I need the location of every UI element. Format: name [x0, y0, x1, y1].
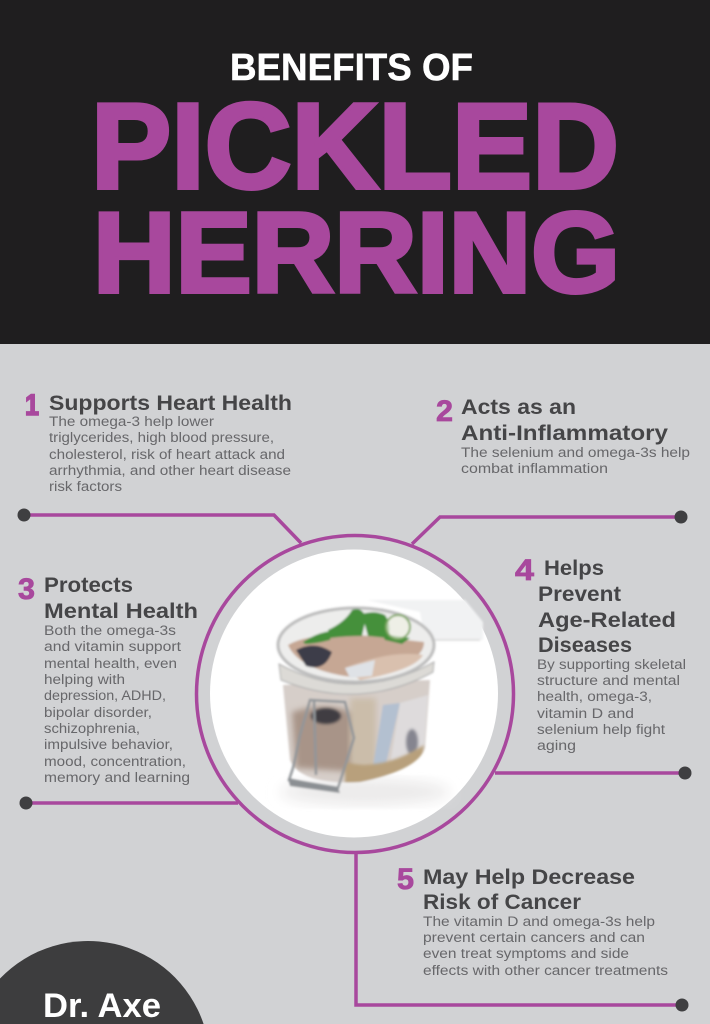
body 4: structure and mental [537, 673, 680, 688]
number 2: 2 [436, 395, 453, 428]
heading 2 [461, 396, 668, 445]
benefit 1 [25, 389, 292, 494]
body 4: health, omega-3, [537, 689, 652, 704]
jar of pickled herring [278, 600, 483, 806]
body 2: combat inflammation [461, 461, 608, 476]
heading 3 [44, 574, 198, 623]
body 4: selenium help fight [537, 722, 665, 737]
title: benefits of: BENEFITS OF [230, 47, 473, 89]
body 5: The vitamin D and omega-3s help [423, 914, 655, 929]
body 5: even treat symptoms and side [423, 946, 629, 961]
body 1: arrhythmia, and other heart disease [49, 463, 291, 478]
body 1: The omega-3 help lower [49, 414, 215, 429]
body 3: schizophrenia, [44, 721, 140, 736]
connector 2 [412, 510, 688, 544]
benefit 2 [436, 395, 690, 476]
connector 4 [495, 766, 692, 780]
heading 1: Supports Heart Health [49, 392, 292, 415]
heading 5 [423, 866, 635, 914]
body 1 [49, 414, 291, 494]
body 3: impulsive behavior, [44, 737, 173, 752]
logo text: Dr. Axe [43, 987, 161, 1024]
number 3: 3 [18, 573, 35, 606]
logo badge [0, 941, 204, 1024]
herb garnish [303, 609, 410, 644]
benefit 3 [18, 573, 198, 785]
body 4: vitamin D and [537, 706, 634, 721]
heading 5: May Help Decrease [423, 866, 635, 889]
heading 4: Diseases [538, 634, 632, 657]
body 5: effects with other cancer treatments [423, 963, 668, 978]
heading 4 [538, 557, 676, 657]
number 5: 5 [397, 863, 414, 896]
body 3: mental health, even [44, 656, 177, 671]
body 4 [537, 657, 686, 753]
body 3: mood, concentration, [44, 754, 186, 769]
connector 5 [356, 853, 688, 1012]
body 3: memory and learning [44, 770, 190, 785]
number 1: 1 [25, 389, 39, 422]
connector 1 [18, 508, 301, 543]
benefit 5 [397, 863, 668, 978]
heading 2: Acts as an [461, 396, 576, 419]
header band [0, 0, 710, 344]
heading 4: Helps [544, 557, 604, 580]
body 3 [44, 623, 190, 785]
body 3: depression, ADHD, [44, 688, 166, 703]
body 1: cholesterol, risk of heart attack and [49, 447, 285, 462]
heading 5: Risk of Cancer [423, 891, 581, 914]
heading 3: Protects [44, 574, 133, 597]
body 3: and vitamin support [44, 639, 181, 654]
title: pickled: PICKLED [91, 78, 619, 214]
body 3: helping with [44, 672, 125, 687]
body 5: prevent certain cancers and can [423, 930, 645, 945]
body 1: triglycerides, high blood pressure, [49, 430, 274, 445]
body 4: By supporting skeletal [537, 657, 686, 672]
body 3: Both the omega-3s [44, 623, 176, 638]
body 4: aging [537, 738, 576, 753]
heading 2: Anti-Inflammatory [461, 422, 668, 445]
central photo circle [196, 536, 514, 852]
heading 4: Prevent [538, 583, 621, 606]
benefit 4 [515, 554, 686, 753]
body 1: risk factors [49, 479, 122, 494]
connector 3 [20, 796, 238, 810]
body 2: The selenium and omega-3s help [461, 445, 690, 460]
body 3: bipolar disorder, [44, 705, 152, 720]
jar clasp [289, 700, 354, 788]
heading 3: Mental Health [44, 600, 198, 623]
title: herring: HERRING [93, 190, 620, 317]
body 2 [461, 445, 690, 476]
body 5 [423, 914, 668, 978]
number 4: 4 [515, 554, 534, 587]
heading 4: Age-Related [538, 609, 676, 632]
